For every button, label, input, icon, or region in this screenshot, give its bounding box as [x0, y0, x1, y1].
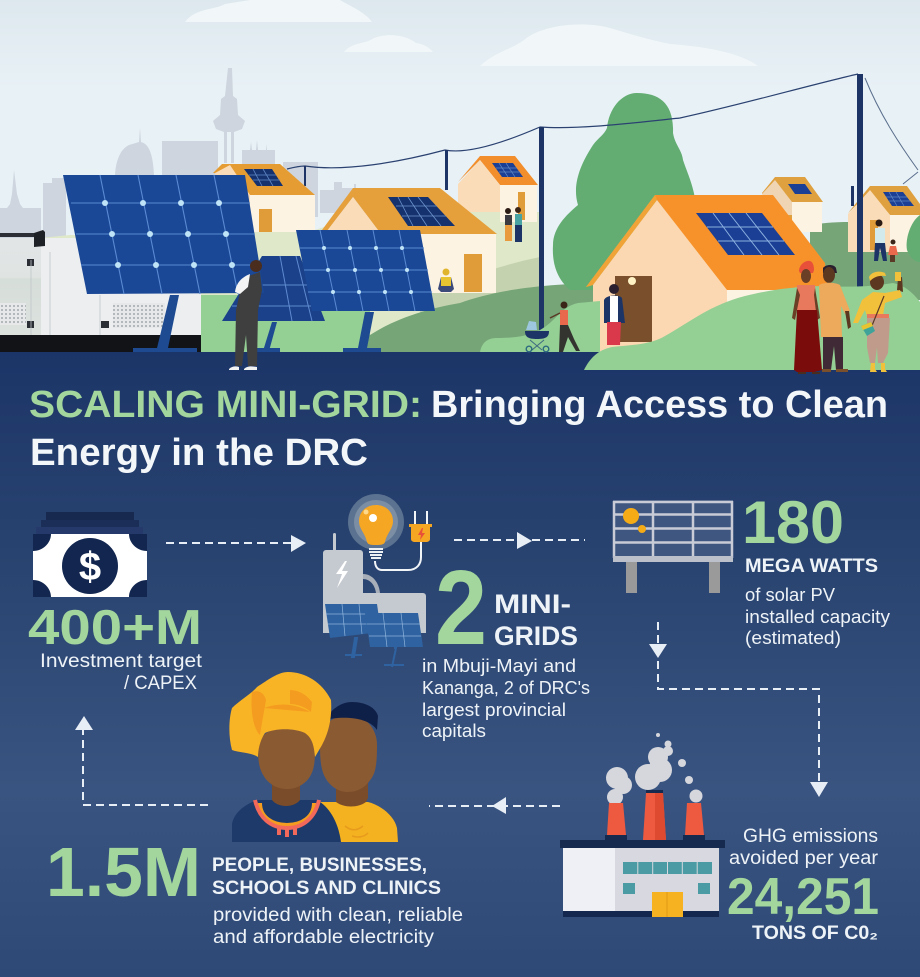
stat: 24,251 tons of CO2 avoided: avoided per year — [729, 848, 879, 869]
stat: 2 mini-grids: in Mbuji-Mayi and — [422, 656, 576, 676]
stat: 2 mini-grids: GRIDS — [494, 621, 578, 651]
stat: 1.5M people, businesses, schools and clinics: and affordable electricity — [213, 927, 435, 948]
woman in red skirt — [792, 261, 822, 374]
panel: navy content background — [0, 352, 920, 977]
stat: 400+M investment target: / CAPEX — [124, 673, 197, 694]
right solar panel — [296, 230, 435, 352]
foreground green hill — [584, 283, 920, 370]
stat: 2 mini-grids: Kananga, 2 of DRC's — [422, 678, 590, 698]
title: Energy in the DRC — [30, 432, 368, 474]
stat: 180 mega watts: of solar PV — [745, 585, 835, 605]
tree — [553, 93, 695, 290]
tree far right — [907, 215, 920, 262]
stat: 180 mega watts — [742, 489, 890, 648]
stat: 2 mini-grids — [422, 549, 590, 741]
person: man at door — [604, 284, 625, 345]
clouds — [185, 0, 758, 66]
utility poles and wires — [287, 74, 918, 206]
arrow: investment to mini-grids — [166, 535, 306, 552]
stat: 2 mini-grids: capitals — [422, 721, 486, 741]
arrow: people back to investment — [75, 716, 208, 805]
main house — [586, 195, 828, 352]
back solar panel — [222, 256, 325, 352]
stat: 180 mega watts: 180 — [742, 489, 844, 556]
icon: stacked banknotes — [33, 512, 147, 597]
poles — [539, 74, 863, 332]
dark green hill — [367, 283, 593, 352]
stat: 24,251 tons of CO2 avoided: 24,251 — [727, 868, 879, 926]
stat: 1.5M people, businesses, schools and clinics: 1.5M — [46, 833, 201, 911]
people: group of three in foreground — [792, 261, 903, 374]
person: man looking at panel — [229, 260, 262, 370]
panel: illustrated village scene — [0, 0, 920, 374]
stat: 1.5M people, businesses, schools and clinics: PEOPLE, BUSINESSES, — [212, 855, 427, 876]
man in orange tunic — [819, 265, 851, 372]
small green hill — [480, 301, 600, 352]
icon: factory with smoke — [560, 733, 725, 917]
arrow: emissions avoided to people — [429, 797, 560, 814]
sky — [0, 0, 920, 352]
icon: stacked banknotes: $ — [79, 545, 101, 589]
stat: 1.5M people, businesses, schools and clinics: SCHOOLS AND CLINICS — [212, 878, 441, 899]
person: woman with pram — [525, 302, 580, 352]
stat: 400+M investment target — [28, 601, 203, 694]
stat: 2 mini-grids: 2 — [435, 549, 487, 667]
house: far right — [848, 186, 920, 252]
stat: 24,251 tons of CO2 avoided: TONS OF C0₂ — [752, 923, 878, 944]
stat: 400+M investment target: 400+M — [28, 601, 202, 655]
woman with headband and phone — [853, 272, 903, 372]
title: Bringing Access to Clean — [431, 384, 888, 426]
stat: 24,251 tons of CO2 avoided — [727, 826, 879, 944]
people: couple by house — [505, 207, 522, 242]
icon: solar panel with sun — [613, 500, 733, 593]
generator — [0, 230, 201, 352]
mid ground band — [420, 257, 540, 330]
people: adult and child far right — [874, 220, 898, 262]
title: SCALING MINI-GRID: — [29, 384, 422, 426]
large solar panel — [63, 175, 264, 352]
stat: 180 mega watts: installed capacity — [745, 607, 890, 627]
house: back left — [213, 164, 315, 256]
city skyline — [0, 68, 368, 243]
stat: 1.5M people, businesses, schools and clinics: provided with clean, reliable — [213, 905, 463, 926]
icon: mini-grid with bulb, plug and solar panels — [323, 494, 432, 667]
light green ground — [195, 295, 370, 352]
house: middle left — [322, 188, 497, 293]
title — [29, 384, 888, 474]
person: seated woman — [438, 268, 454, 292]
house: back right — [762, 177, 823, 232]
arrow: mini-grids to solar capacity — [454, 532, 585, 549]
icon: woman and man — [229, 672, 398, 842]
house: center top — [458, 156, 538, 222]
stat: 180 mega watts: MEGA WATTS — [745, 556, 878, 577]
stat: 1.5M people, businesses, schools and clinics — [46, 833, 463, 948]
stat: 180 mega watts: (estimated) — [745, 628, 841, 648]
arrow: solar capacity to emissions avoided — [649, 622, 828, 797]
stat: 2 mini-grids: largest provincial — [422, 700, 566, 720]
stat: 24,251 tons of CO2 avoided: GHG emissions — [743, 826, 878, 847]
back pale ground — [40, 212, 540, 352]
stat: 2 mini-grids: MINI- — [494, 589, 571, 619]
stat: 400+M investment target: Investment target — [40, 651, 203, 672]
dark green ground right — [810, 222, 920, 300]
